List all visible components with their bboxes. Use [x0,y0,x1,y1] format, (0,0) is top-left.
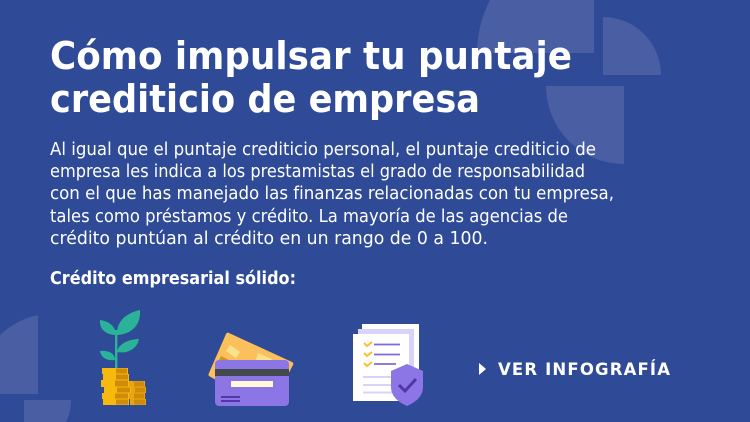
title: crediticio de empresa [50,77,480,121]
body paragraph: crédito puntúan al crédito en un rango de 0 a 100. [50,229,488,249]
call to action: ver infografía: VER INFOGRAFÍA [498,360,670,379]
body paragraph: empresa les indica a los prestamistas el grado de responsabilidad [50,162,585,182]
icon: plant growing from coins [100,310,146,405]
title [50,34,572,121]
icon: checklist document with shield [353,324,423,406]
body paragraph [50,140,614,249]
body paragraph: Al igual que el puntaje crediticio personal, el puntaje crediticio de [50,140,596,160]
title: Cómo impulsar tu puntaje [50,34,572,78]
body paragraph: tales como préstamos y crédito. La mayoría de las agencias de [50,207,568,227]
icon: credit cards [208,333,293,406]
subheading: Crédito empresarial sólido: [50,269,296,289]
body paragraph: con el que has manejado las finanzas relacionadas con tu empresa, [50,184,614,204]
